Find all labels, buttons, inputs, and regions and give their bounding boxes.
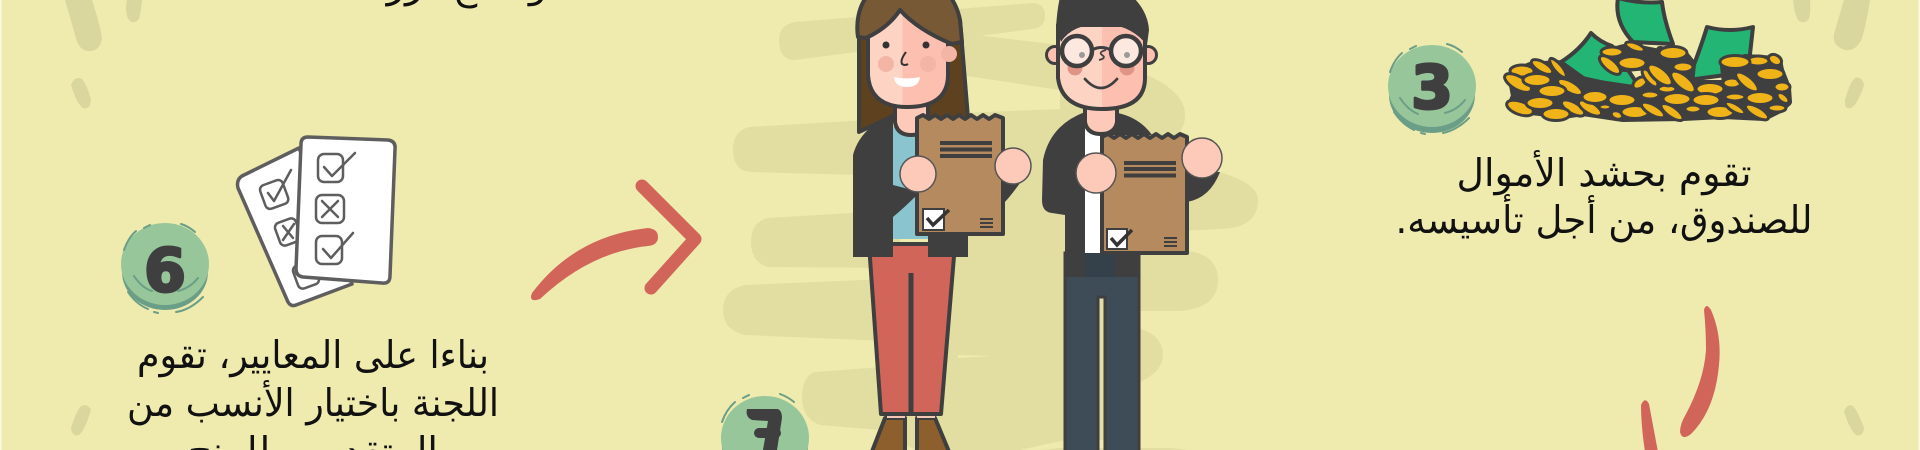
front card — [296, 137, 395, 283]
decorative streaks right — [1793, 0, 1870, 435]
text: step 6: اللجنة باختيار الأنسب من — [127, 379, 499, 426]
text: step 6: بناءا على المعايير، تقوم — [137, 333, 489, 378]
back card — [238, 148, 352, 306]
arrow: from step 6 to characters — [531, 186, 695, 300]
shirt — [1085, 127, 1100, 253]
icon: checklist cards — [238, 137, 395, 306]
decorative streaks left — [65, 0, 142, 435]
jacket — [1042, 112, 1152, 277]
ears — [1046, 46, 1064, 64]
character: woman holding document — [853, 0, 1031, 450]
digit 7 — [747, 409, 782, 450]
top hair — [857, 0, 962, 44]
coin pile backing — [1512, 47, 1788, 118]
trousers — [1065, 253, 1139, 450]
scribble background behind the characters — [723, 3, 1258, 450]
neck — [1085, 100, 1117, 134]
digit 6: 6 — [144, 236, 186, 306]
glasses — [1062, 36, 1141, 66]
badge: step 6 — [121, 223, 209, 313]
cheeks — [1068, 60, 1082, 76]
coins — [1502, 40, 1791, 124]
shoes — [871, 418, 950, 450]
ear — [941, 46, 957, 62]
hair — [1056, 0, 1149, 45]
icon: money pile — [1502, 0, 1791, 124]
banknotes — [1561, 0, 1753, 88]
neck and shirt — [893, 127, 928, 239]
hands — [900, 156, 936, 192]
digit 3: 3 — [1411, 53, 1453, 123]
text: step 6 — [127, 333, 499, 450]
hands — [1076, 153, 1116, 193]
text: step 3: تقوم بحشد الأموال — [1456, 149, 1752, 196]
character: man holding document — [1042, 0, 1222, 450]
text: step 3 — [1396, 149, 1812, 243]
blazer — [853, 114, 893, 257]
trousers — [869, 244, 955, 414]
text: step 3: للصندوق، من أجل تأسيسه. — [1396, 194, 1812, 243]
arrow: from step 3 downward — [1641, 306, 1720, 450]
badge: step 3 — [1388, 44, 1476, 134]
badge: step 7 — [721, 394, 809, 450]
document — [917, 115, 1003, 234]
face — [868, 5, 948, 107]
face — [1058, 25, 1145, 109]
document — [1102, 134, 1187, 253]
top text fragment (cropped) — [385, 0, 547, 9]
back hair — [859, 20, 968, 132]
